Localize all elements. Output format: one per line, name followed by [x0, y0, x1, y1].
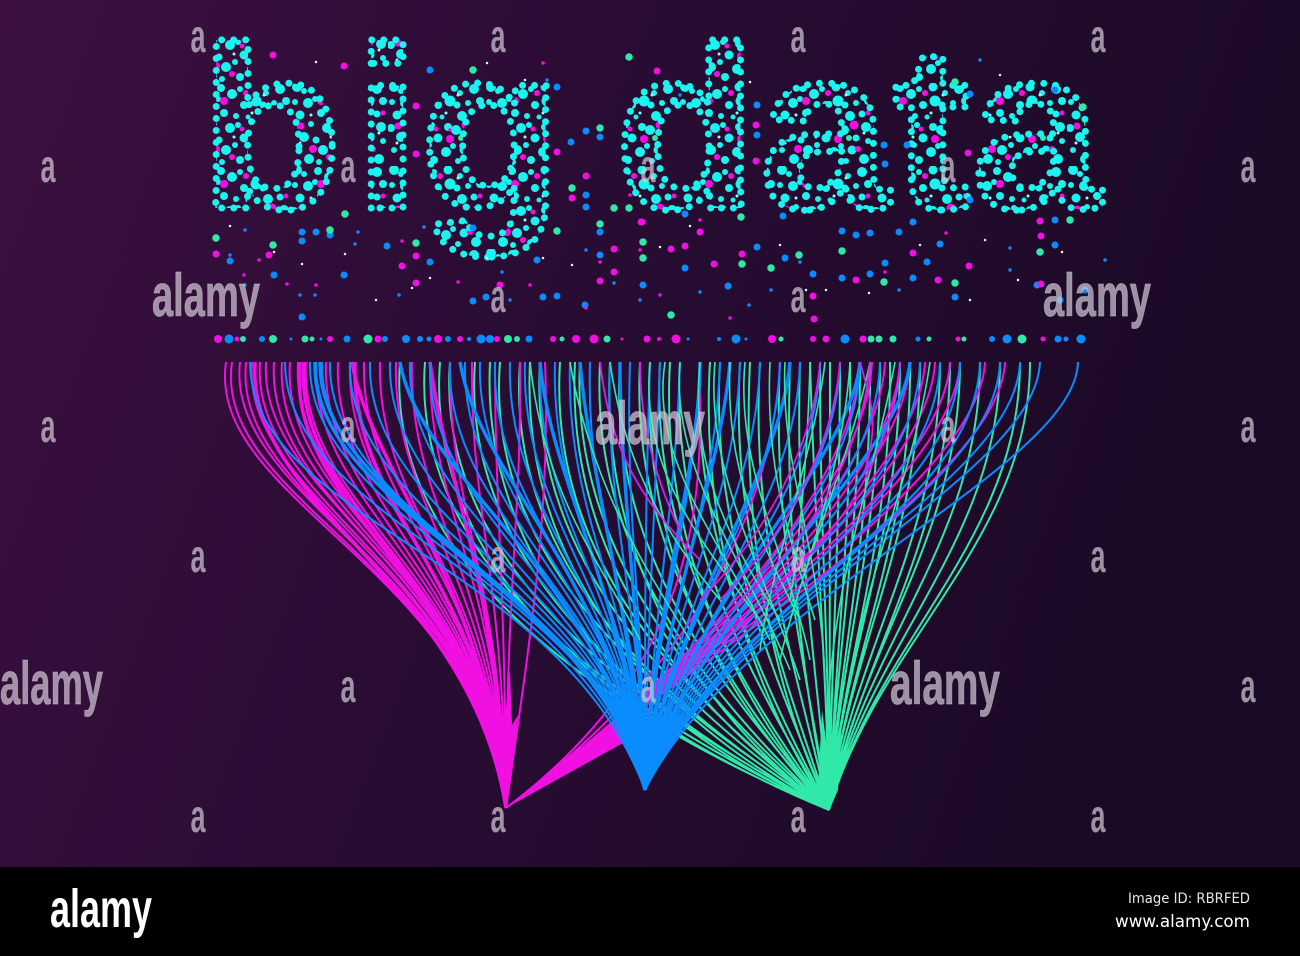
watermark: small a marks: a	[640, 140, 656, 192]
watermark: small a marks: a	[190, 10, 206, 62]
magenta fan, thick strands	[255, 362, 506, 808]
watermark: small a marks: a	[790, 10, 806, 62]
watermark: small a marks: a	[40, 400, 56, 452]
watermark: alamy repeated	[0, 262, 1151, 717]
magenta fan, right sweep	[506, 362, 1005, 808]
watermark: small a marks: a	[490, 790, 506, 842]
icon: green apex	[795, 710, 842, 811]
scattered data dots	[216, 55, 1105, 319]
watermark: alamy repeated: alamy	[152, 262, 260, 329]
watermark: small a marks: a	[490, 530, 506, 582]
watermark: small a marks: a	[790, 270, 806, 322]
watermark: alamy repeated: alamy	[595, 390, 705, 457]
watermark: small a marks: a	[1240, 660, 1256, 712]
watermark: small a marks: a	[490, 270, 506, 322]
dotted divider row	[214, 334, 1086, 344]
watermark: small a marks: a	[1240, 140, 1256, 192]
watermark: small a marks: a	[940, 400, 956, 452]
green overlay strands	[530, 362, 930, 680]
green fan, right sweep	[810, 362, 1030, 810]
watermark: small a marks: a	[1090, 530, 1106, 582]
footer bar	[0, 867, 1300, 956]
watermark: small a marks: a	[40, 140, 56, 192]
magenta fan, left sweep	[225, 362, 546, 808]
image id: Image ID: RBRFED	[1128, 891, 1250, 907]
watermark: small a marks: a	[1090, 10, 1106, 62]
watermark: alamy repeated: alamy	[0, 650, 103, 717]
watermark: small a marks: a	[490, 10, 506, 62]
icon: magenta wedge	[490, 670, 650, 808]
watermark: small a marks: a	[790, 790, 806, 842]
footer logo: alamy	[50, 879, 152, 939]
watermark: small a marks: a	[1240, 400, 1256, 452]
watermark: small a marks: a	[640, 660, 656, 712]
green fan, left sweep	[399, 362, 829, 810]
blue fan, left sweep	[250, 362, 650, 790]
title: big data in dots: big data	[200, 0, 1103, 258]
magenta overlay strands	[600, 362, 900, 600]
watermark: alamy repeated: alamy	[1043, 262, 1151, 329]
watermark: small a marks: a	[340, 400, 356, 452]
watermark: small a marks: a	[940, 140, 956, 192]
watermark: small a marks: a	[190, 530, 206, 582]
network fans chart	[225, 362, 1078, 811]
website: www.alamy.com	[1115, 912, 1250, 932]
watermark: small a marks: a	[790, 530, 806, 582]
watermark: small a marks: a	[190, 790, 206, 842]
watermark: small a marks: a	[1090, 790, 1106, 842]
watermark: small a marks: a	[340, 660, 356, 712]
blue fan, right sweep	[645, 362, 1078, 790]
icon: blue apex	[618, 680, 678, 791]
blue fan, thick strands	[315, 362, 910, 790]
watermark: small a marks: a	[340, 140, 356, 192]
watermark: alamy repeated: alamy	[890, 650, 1000, 717]
